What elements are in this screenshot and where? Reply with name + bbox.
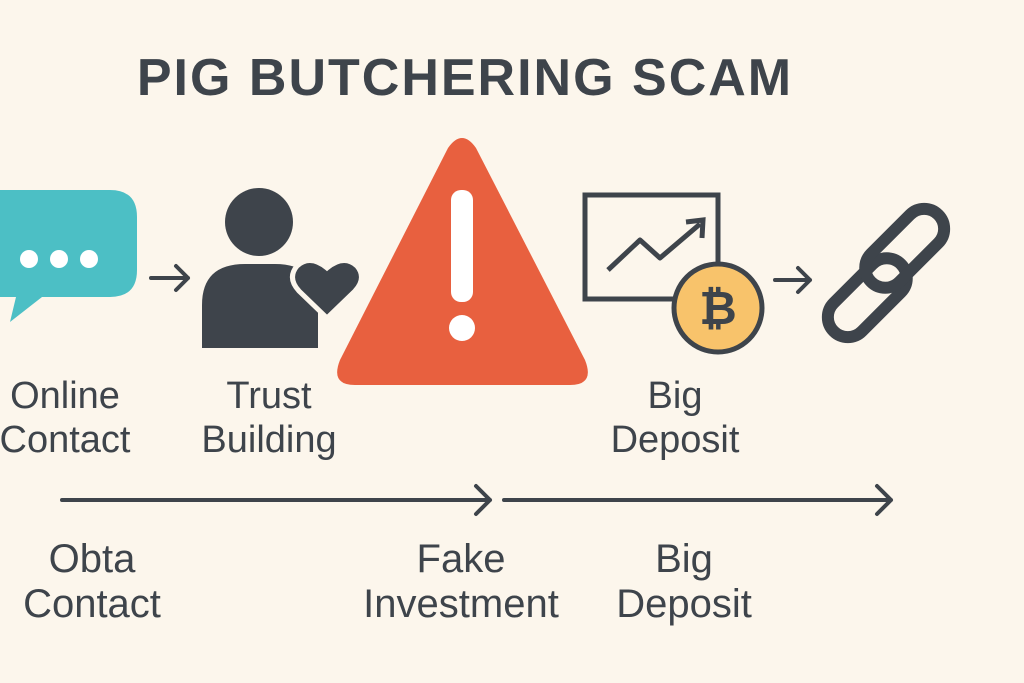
icon: warning triangle <box>337 138 588 385</box>
label: big deposit bottom: Big <box>655 537 713 581</box>
arrow: timeline left <box>62 486 490 514</box>
label: online contact <box>0 375 130 461</box>
title: PIG BUTCHERING SCAM <box>137 49 793 107</box>
label: trust building <box>201 375 337 461</box>
label: trust building: Building <box>201 419 337 461</box>
label: trust building: Trust <box>226 375 312 417</box>
label: fake investment: Fake <box>417 537 505 581</box>
label: obta contact: Obta <box>49 537 135 581</box>
label: big deposit top <box>611 375 740 461</box>
label: online contact: Contact <box>0 419 130 461</box>
icon: chain link <box>820 201 952 345</box>
icon: chart with bitcoin: ₿ <box>699 282 737 334</box>
arrow: timeline right <box>504 486 891 514</box>
label: big deposit top: Big <box>648 375 702 417</box>
icon: person with heart <box>202 188 362 348</box>
label: big deposit bottom <box>616 537 752 626</box>
label: obta contact <box>23 537 161 626</box>
label: fake investment <box>363 537 559 626</box>
icon: chat bubble <box>0 190 137 322</box>
label: big deposit bottom: Deposit <box>616 582 752 626</box>
arrow: bitcoin to chain <box>775 268 810 292</box>
label: obta contact: Contact <box>23 582 161 626</box>
arrow: chat to person <box>151 266 188 290</box>
label: online contact: Online <box>10 375 120 417</box>
label: big deposit top: Deposit <box>611 419 739 461</box>
label: fake investment: Investment <box>363 582 559 626</box>
icon: chart with bitcoin <box>585 195 762 352</box>
